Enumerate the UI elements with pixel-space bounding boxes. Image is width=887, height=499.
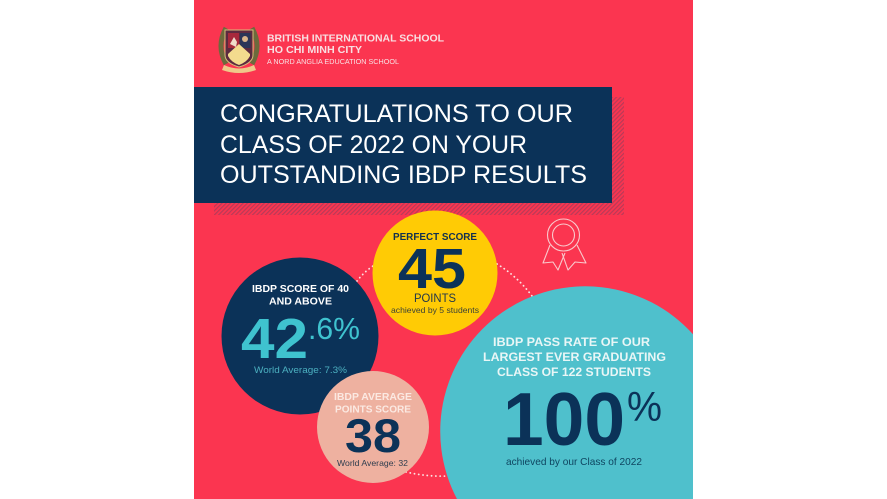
title banner shadow hatch <box>214 97 624 215</box>
stat circle: pass rate: % <box>627 383 662 430</box>
school name <box>267 32 445 66</box>
stat circle: IBDP 40 and above: 42 <box>241 307 308 371</box>
stat circle: pass rate <box>440 286 693 499</box>
title banner <box>194 87 612 203</box>
stat circle: perfect score <box>372 210 498 336</box>
stat circle: IBDP 40 and above: World Average: 7.3% <box>254 365 348 376</box>
title text: CONGRATULATIONS TO OUR <box>220 100 573 128</box>
red background panel <box>194 0 693 499</box>
stat circle: average points: 38 <box>345 409 401 462</box>
stat circle: average points: IBDP AVERAGE <box>334 392 412 403</box>
stat circle: perfect score: POINTS <box>414 293 456 305</box>
stat circle: IBDP 40 and above <box>222 258 378 414</box>
stat circle: IBDP 40 and above: .6% <box>308 311 360 346</box>
stat circle: pass rate: LARGEST EVER GRADUATING <box>483 350 666 364</box>
stat circle: IBDP 40 and above: AND ABOVE <box>269 296 332 308</box>
stat circle: pass rate: achieved by our Class of 2022 <box>506 456 642 468</box>
stat circle: average points: POINTS SCORE <box>335 404 411 416</box>
school name: HO CHI MINH CITY <box>267 44 362 56</box>
stat circle: average points <box>317 371 429 483</box>
stat circle: IBDP 40 and above: IBDP SCORE OF 40 <box>252 284 349 295</box>
stat circle: perfect score: achieved by 5 students <box>391 305 479 315</box>
title text: CLASS OF 2022 ON YOUR <box>220 131 527 159</box>
title text: OUTSTANDING IBDP RESULTS <box>220 161 587 189</box>
title text <box>220 100 587 189</box>
stat circle: pass rate: CLASS OF 122 STUDENTS <box>497 365 651 379</box>
school name: BRITISH INTERNATIONAL SCHOOL <box>267 32 445 44</box>
dotted connectors <box>357 264 532 476</box>
stat circle: perfect score: PERFECT SCORE <box>393 232 477 243</box>
stat circle: average points: World Average: 32 <box>337 458 408 468</box>
stat circle: pass rate: 100 <box>503 377 625 461</box>
school logo crest <box>221 28 257 73</box>
stat circle: perfect score: 45 <box>398 237 466 301</box>
icon: award ribbon <box>543 219 586 270</box>
stat circle: pass rate: IBDP PASS RATE OF OUR <box>493 335 650 349</box>
school name: A NORD ANGLIA EDUCATION SCHOOL <box>267 57 399 66</box>
